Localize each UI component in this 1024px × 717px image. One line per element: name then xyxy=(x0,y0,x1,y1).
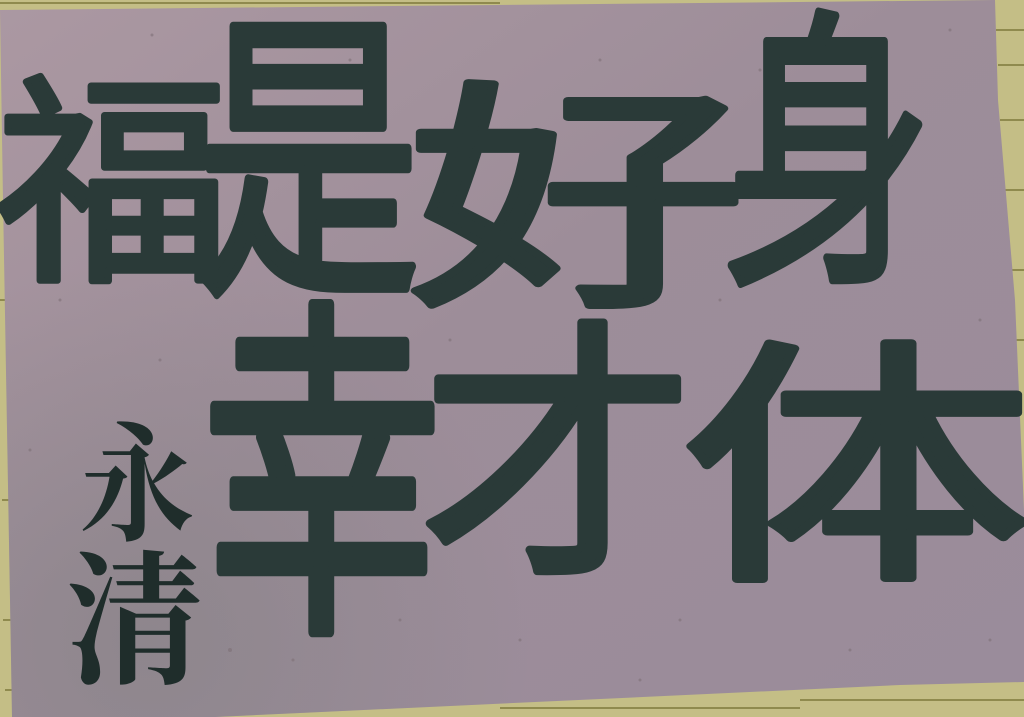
signature xyxy=(66,417,204,704)
character 才: 才 xyxy=(420,306,694,612)
character 身: 身 xyxy=(722,0,932,320)
character 幸: 幸 xyxy=(202,282,442,679)
character 体: 体 xyxy=(681,327,1024,614)
character 是: 是 xyxy=(196,0,421,335)
character 好: 好 xyxy=(407,67,747,338)
character 福: 福 xyxy=(0,60,230,311)
signature: 清 xyxy=(66,543,204,704)
signature: 永 xyxy=(80,417,195,558)
